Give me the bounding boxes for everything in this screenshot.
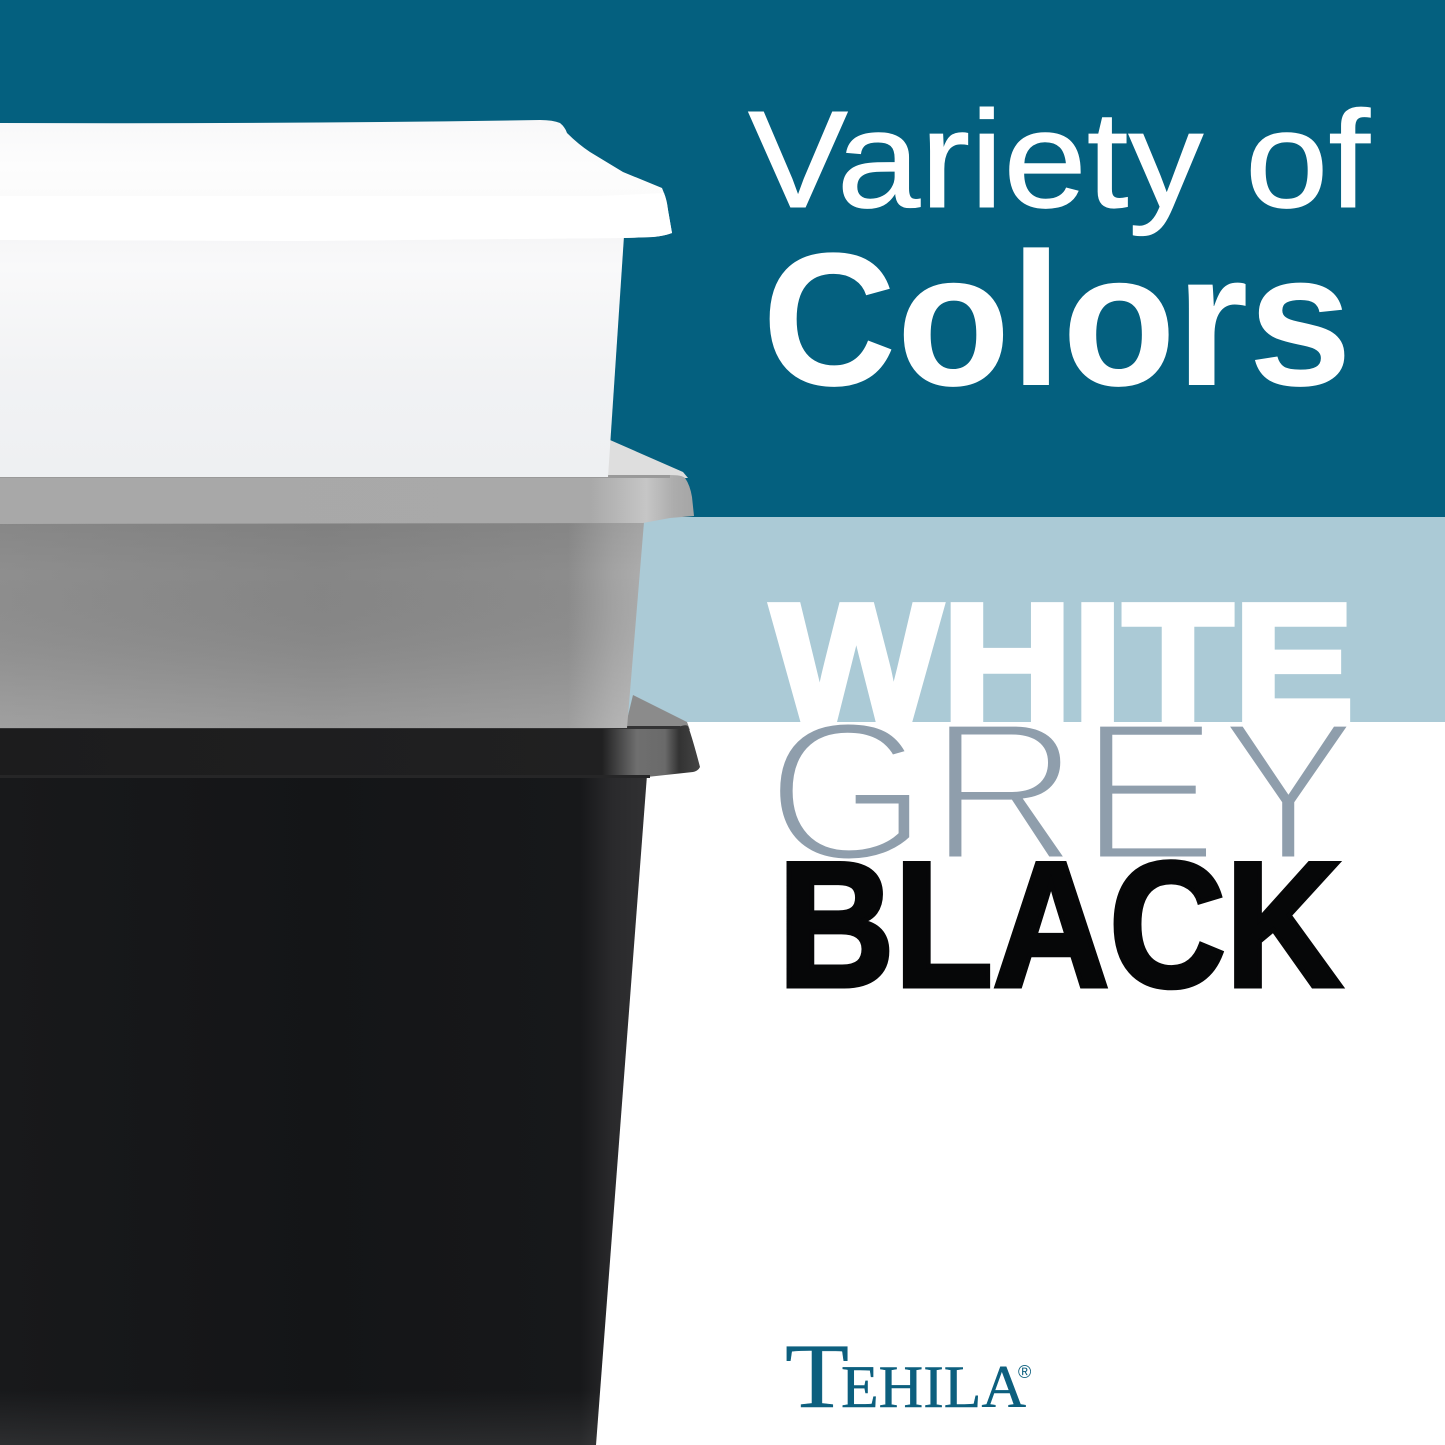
heading: Colors: Colors: [762, 214, 1352, 426]
word: WHITE: WHITE: [771, 570, 1354, 756]
grey bin body: [0, 522, 644, 728]
logo large initial: T: [785, 1325, 849, 1427]
white bin body: [0, 236, 624, 477]
logo small capitals: EHILA: [841, 1354, 1026, 1420]
word: GREY: GREY: [766, 681, 1358, 903]
bin: grey: [0, 440, 694, 728]
panel: light blue band: [600, 517, 1445, 722]
panel: teal header background: [0, 0, 1445, 517]
white bin lid rim: [0, 193, 672, 241]
bin: black: [0, 695, 700, 1445]
black bin body: [0, 775, 647, 1445]
logo: Tehila: [785, 1325, 1031, 1427]
heading: Variety of: Variety of: [748, 83, 1371, 237]
grey bin lid top surface: [600, 440, 688, 478]
black bin lid top surface: [625, 695, 690, 730]
grey bin lid rim: [0, 475, 694, 524]
bin: white: [0, 120, 672, 477]
logo registered mark: ®: [1018, 1362, 1031, 1382]
black bin lid rim: [0, 725, 700, 778]
word: BLACK: BLACK: [778, 825, 1342, 1024]
white bin lid: [0, 120, 672, 241]
